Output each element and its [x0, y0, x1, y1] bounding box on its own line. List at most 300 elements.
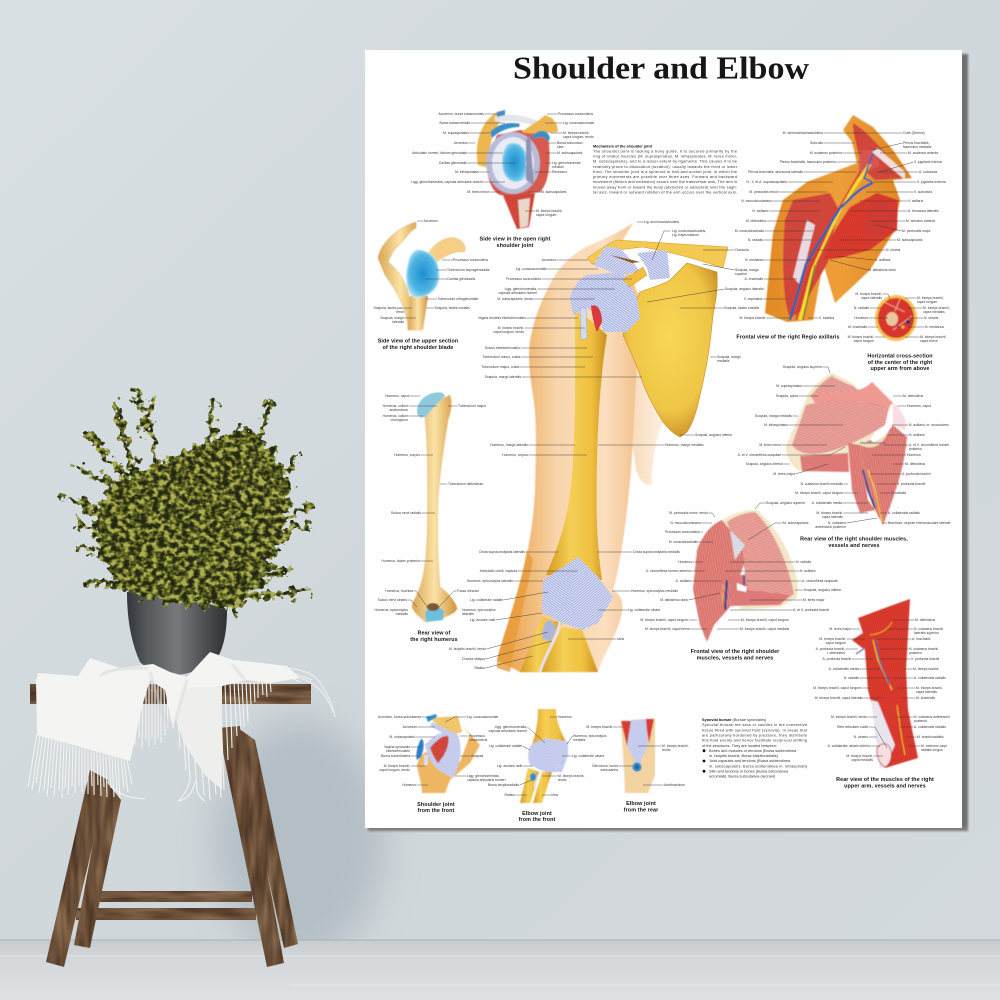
labels: left: M. biceps brachii, caput longum: [640, 618, 688, 622]
labels: right: caput lateralis: [916, 690, 937, 694]
labels: left: N. radialis: [854, 306, 869, 310]
labels: right: M. triceps brachii, caput longum: [741, 618, 789, 622]
leader lines: [404, 221, 453, 318]
illustration: elbow joint: [520, 709, 568, 803]
labels: right: V. axillaris: [908, 199, 923, 203]
labels: right: M. subscapularis: [783, 521, 809, 525]
labels: left: M. teres major: [829, 627, 852, 631]
block body: The shoulder joint is lacking a bony guide. It is secured primarily by the: [593, 149, 737, 153]
labels: right: Humerus, margo medialis: [665, 443, 704, 447]
labels: right: A. subclavia: [919, 170, 937, 174]
labels: right: M. teres major: [803, 598, 826, 602]
labels: left: M. biceps brachii,: [384, 764, 410, 768]
block body: ring of rotator muscles (M. supraspinatus, M. infraspinatus, M. teres minor,: [593, 154, 737, 158]
labels: left: [738, 365, 847, 529]
labels: left: Humerus, margo lateralis: [490, 443, 528, 447]
caption: Horizontal cross-section: [867, 354, 933, 360]
labels: left: Ligg. glenohumeralia,: [505, 287, 537, 291]
labels: right: Tuberculum majus: [458, 404, 486, 408]
labels: right: posterior: [909, 651, 923, 655]
labels: left: [488, 725, 527, 797]
labels: right: caput longum, tendo: [563, 135, 594, 139]
labels: right: Scapula, angulus lateralis: [725, 287, 764, 291]
block body: this fluid evenly and hence facilitate reciprocal shifting: [702, 739, 807, 743]
labels: right: N. cutaneus antebrachii: [914, 715, 950, 719]
labels: left: Humerus, corpus: [394, 453, 420, 457]
labels: left: M. teres minor: [759, 443, 782, 447]
labels: left: [449, 258, 556, 670]
labels: left: Scapula, spina: [776, 394, 798, 398]
labels: left: Articulatio humeri, labrum glenoidale: [412, 151, 467, 155]
labels: right: Bursa subcoraco-: [557, 141, 584, 145]
text block: mechanism of the shoulder joint: [593, 144, 738, 194]
labels: left: M. latissimus dorsi: [660, 598, 688, 602]
block body: Skin and tendons or bones (Bursa subcutanea: [709, 770, 789, 774]
labels: left: caput medialis: [851, 758, 873, 762]
block body: of the structures. They are located between:: [702, 744, 777, 748]
labels: right: M. brachioradialis: [917, 735, 944, 739]
leader lines: [408, 396, 458, 608]
labels: right: A. axillaris: [875, 258, 891, 262]
right panel fringe: [176, 678, 271, 801]
labels: left: M. pectoralis minor: [749, 190, 779, 194]
labels: left: M. teres minor: [467, 190, 490, 194]
labels: left: A. collateralis ulnaris inferior: [828, 744, 871, 748]
labels: left: N. cutaneus: [828, 521, 846, 525]
stool seat: [30, 684, 311, 704]
labels: right: [909, 618, 950, 752]
illustration: clavicle: [587, 240, 728, 268]
labels: left: Radius: [474, 666, 485, 670]
labels: right: V. profunda brachii: [897, 482, 925, 486]
illustration: frontal shoulder muscles: [693, 510, 798, 642]
labels: left: Scapula, angulus superior: [783, 365, 823, 369]
labels: left: intertubercularis: [386, 749, 410, 753]
labels: right: Scapula, margo: [717, 355, 741, 359]
labels: Antebrachium: [664, 783, 685, 787]
labels: left: Tuberculum minus, crista: [482, 355, 520, 359]
stool front right leg: [218, 726, 284, 967]
labels: right: caput medialis: [923, 310, 945, 314]
caption: Rear view of the right shoulder muscles,: [800, 536, 908, 542]
caption: of the center of the right: [868, 360, 932, 366]
panel: elbow joint from the front: [488, 709, 607, 823]
illustration: cross-section: [875, 295, 917, 341]
labels: right: M. biceps brachii,: [536, 209, 562, 213]
labels: left: N. radialis: [748, 238, 763, 242]
labels: left: Sulcus intertubercularis: [485, 346, 520, 350]
labels: right: Crista supracondylaris medialis: [633, 550, 680, 554]
labels: left: Humerus, collum: [383, 404, 408, 408]
block body: m. subscapularis, Bursa subtendinea m. infraspinati): [709, 764, 808, 768]
labels: right: M. deltoideus: [915, 618, 935, 622]
labels: right: Processus coracoideus: [558, 112, 593, 116]
labels: right: M. subscapularis: [897, 238, 923, 242]
labels: right: M. biceps brachii: [913, 667, 939, 671]
labels: left: M. triceps brachii, tendo: [831, 715, 867, 719]
labels: left: [640, 511, 708, 631]
labels: left: Humerus: [402, 783, 416, 787]
labels: left: Ligg. glenohumeralia,: [495, 725, 527, 729]
labels: right: Lig. coracoacromiale: [563, 121, 594, 125]
labels: left: Bursa subacromialis: [439, 121, 470, 125]
labels: subcutanea: [600, 768, 618, 772]
labels: tendo: [662, 748, 671, 752]
labels: right: Scapula, margo: [735, 268, 759, 272]
labels: left: V. cephalica: [744, 297, 762, 301]
labels: left: Humerus, facies posterior: [381, 559, 421, 563]
text block: synovial bursae: [702, 718, 808, 779]
illustration: radius and ulna: [520, 617, 598, 672]
labels: right: Tuberculum deltoideum: [448, 482, 483, 486]
labels: right: V. jugularis interna: [914, 160, 942, 164]
labels: left: M. triceps brachii, caput longum: [795, 491, 843, 495]
labels: right: M. subscapularis: [541, 190, 567, 194]
illustration: shoulder capsule ligaments: [570, 247, 670, 340]
labels: left: Acromion: [454, 141, 468, 145]
labels: left: M. infraspinatus: [764, 423, 788, 427]
caption: Side view in the open right: [480, 236, 551, 242]
labels: right: [448, 404, 496, 616]
labels: left: caput longum: [826, 641, 846, 645]
labels: left: A. et V. circumflexa scapulae: [738, 453, 781, 457]
labels: left: Vagina synovialis: [384, 745, 410, 749]
labels: right: lateralis superior: [914, 631, 940, 635]
labels: left: M. biceps brachii,: [848, 335, 874, 339]
labels: left: Bursa bicipitoradialis: [488, 783, 519, 787]
stool front left leg: [46, 770, 108, 967]
labels: right: N. radialis: [891, 491, 906, 495]
labels: left: Acromion, bursa subcutanea: [378, 715, 421, 719]
labels: right: Ulna: [551, 793, 558, 797]
stool back left leg: [74, 780, 121, 948]
caption: from the front: [519, 817, 555, 823]
labels: right: [819, 131, 946, 320]
labels: left: M. sternocleidomastoideus: [783, 131, 823, 135]
caption: from the rear: [624, 807, 659, 813]
leader lines: [846, 620, 920, 756]
labels: right: Lig. acromioclavicularis: [644, 220, 679, 224]
illustration: scapula: [623, 263, 717, 437]
labels: right: M. extensor carpi: [921, 744, 947, 748]
labels: left: A. profunda brachii,: [816, 647, 845, 651]
labels: right: Scapula, angulus inferior: [695, 433, 733, 437]
panel: frontal view of the right regio axillaris: [735, 115, 946, 340]
labels: left: Ligg. glenohumeralia, capsula articularis humeri: [411, 180, 483, 184]
block body: Bones and muscles or tendons (Bursa subtendinea: [709, 749, 797, 753]
labels: left: Plexus brachialis, fasciculus posterior: [780, 160, 837, 164]
labels: right: V. subclavia: [914, 190, 932, 194]
labels: right: [740, 501, 842, 631]
blanket main folds: [36, 652, 300, 761]
labels: left: M. coracobrachialis: [735, 229, 764, 233]
block body: tissue filled with synovial fluid (synovia). In areas that: [702, 728, 808, 732]
labels: right: Scapula, facies costalis: [434, 306, 470, 310]
caption: vessels and nerves: [828, 543, 880, 549]
labels: left: M. biceps brachii, caput breve: [645, 627, 690, 631]
labels: right: medialis: [573, 738, 586, 742]
labels: left: Processus coracoideus: [506, 277, 541, 281]
labels: left: medialis: [396, 612, 408, 616]
labels: left: Acromion: [403, 725, 417, 729]
labels: right: Lig. trapezoideum: [672, 233, 699, 237]
labels: right: caput breve: [920, 339, 938, 343]
block body: primary movements are possible over three axes. Forward and backward: [593, 175, 737, 179]
labels: right: Clavicula: [735, 248, 749, 252]
leader lines: [516, 717, 572, 795]
labels: right: N. cutaneus brachii: [909, 647, 938, 651]
labels: right: Humerus, caput: [907, 404, 931, 408]
labels: right: A. collateralis radialis: [914, 725, 946, 729]
labels: left: r. deltoideus: [827, 651, 845, 655]
labels: left: M. biceps brachii,: [498, 326, 524, 330]
right fringe trail: [262, 664, 335, 717]
caption: of the right shoulder blade: [383, 345, 453, 351]
labels: left: [813, 627, 873, 762]
labels: right: Humerus, epicondylus medialis: [631, 589, 678, 593]
labels: left: capsula articularis humeri: [489, 729, 527, 733]
labels: left: lateralis: [392, 320, 404, 324]
title: Shoulder and Elbow: [513, 50, 809, 86]
labels: right: Lig. collaterale ulnare: [572, 754, 604, 758]
labels: right: A. et V. circumflexa humeri: [909, 443, 949, 447]
panel: main arm and shoulder diagram: [449, 220, 764, 672]
labels: right: [551, 715, 607, 797]
labels: right: Tuberculum infraglenoidale: [438, 297, 478, 301]
labels: M. triceps brachii,: [662, 744, 689, 748]
labels: right: N. cutaneus brachii: [914, 627, 943, 631]
labels: left: caput longum, tendo: [493, 330, 524, 334]
labels: right: Humerus: [907, 453, 921, 457]
labels: left: M. subscapularis: [390, 735, 415, 739]
labels: right: coracoideus: [469, 738, 488, 742]
white blanket: [28, 652, 335, 801]
labels: left: Processus coracoideus: [665, 530, 700, 534]
block body: tal axis. Inward or outward rotation of the arm occurs over the vertical axis.: [593, 190, 737, 194]
leader lines: [612, 727, 664, 785]
stool rails: [76, 891, 256, 920]
labels: left: Scapula, margo: [380, 316, 404, 320]
labels: right: Tuberculum supraglenoidale: [447, 268, 490, 272]
illustration: arm skin: [497, 223, 663, 672]
labels: right: medium: [552, 165, 564, 169]
labels: left: Cavitas glenoidalis: [439, 161, 467, 165]
labels: left: Humerus, corpus: [502, 453, 528, 457]
stool back right leg: [235, 726, 298, 948]
illustration: elbow rear: [621, 719, 655, 793]
labels: right: M. triceps brachii,: [923, 306, 950, 310]
labels: right: M. triceps brachii,: [916, 686, 943, 690]
labels: left: chirurgicum: [390, 418, 408, 422]
labels: left: N. cutaneus brachii medialis: [801, 482, 843, 486]
caption: Rear view of the muscles of the right: [836, 777, 934, 783]
illustration: rear arm muscles: [852, 599, 918, 768]
labels: left: Sulcus nervi ulnaris: [378, 598, 407, 602]
caption: upper arm, vessels and nerves: [844, 783, 926, 789]
labels: right: [888, 394, 951, 525]
labels: right: Brachium, septum intermusculare laterale: [888, 521, 951, 525]
labels: left: M. scalenus posterior: [810, 151, 843, 155]
illustration: humerus: [546, 310, 607, 580]
labels: right: A. circumflexa scapulae: [802, 579, 838, 583]
labels: right: A. collateralis radialis: [914, 676, 946, 680]
labels: left: Scapula, margo lateralis: [485, 375, 521, 379]
bullets: [703, 749, 705, 773]
labels: left: M. supraspinatus: [443, 131, 469, 135]
labels: right: M. triceps brachii,: [917, 296, 944, 300]
labels: right: N. ulnaris: [886, 248, 901, 252]
labels: right: N. ulnaris: [924, 316, 939, 320]
caption: upper arm from above: [871, 366, 929, 372]
labels: right: M. deltoideus: [905, 462, 925, 466]
labels: right: M. scalenus anterior: [908, 151, 939, 155]
labels: left: [378, 715, 421, 787]
labels: left: M. bicipitis brachii, tendo: [449, 647, 486, 651]
block body: M. subscapularis), and to a lesser extent by ligaments. This causes it to be: [593, 160, 737, 164]
illustration: open joint: [477, 110, 558, 229]
labels: left: N. musculocutaneus: [670, 521, 701, 525]
panel: side view of the upper section of the right shoulder blade: [373, 219, 490, 351]
labels: left: Lig. collaterale radiale: [470, 598, 503, 602]
labels: right: A. thoracica lateralis: [908, 209, 939, 213]
labels: right: idea: [557, 145, 564, 149]
labels: right: Lig. glenohumerale: [552, 161, 581, 165]
labels: left: Rete articulare cubiti: [837, 725, 868, 729]
labels: left: [411, 112, 490, 194]
caption: Elbow joint: [626, 801, 656, 807]
caption: from the front: [418, 808, 454, 814]
labels: right: A. et V. profunda brachii: [793, 608, 829, 612]
labels: right: M. serratus anterior: [906, 219, 936, 223]
block body: Joint-capsules and tendons (Bursa subtendinea: [709, 759, 791, 763]
labels: right: Humerus: [558, 715, 572, 719]
labels: left: M. triceps brachii,: [819, 637, 846, 641]
labels: left: Chorda obliqua: [462, 657, 485, 661]
labels: left: Articulatio cubiti, capsula: [480, 569, 517, 573]
floor: [0, 940, 1000, 1000]
labels: right: lateralis: [462, 612, 474, 616]
labels: right: A. collateralis radialis: [888, 511, 920, 515]
leader lines: [688, 503, 804, 629]
labels: right: posterior: [909, 447, 923, 451]
labels: right: caput longum: [536, 213, 557, 217]
labels: right: M. deltoideus: [903, 394, 923, 398]
labels: right: Scapula, angulus superior: [766, 501, 806, 505]
labels: left: caput lateralis: [822, 515, 843, 519]
panel: rear view of the right humerus: [374, 392, 496, 643]
labels: M. triceps brachii: [586, 725, 612, 729]
labels: left: [374, 394, 421, 616]
labels: left: M. biceps brachii: [740, 316, 765, 320]
labels: right: V. jugularis externa: [917, 180, 946, 184]
labels: right: Cutis (Dermis): [903, 131, 925, 135]
labels: right: Humerus, epicondylus: [573, 734, 607, 738]
caption: Elbow joint: [522, 811, 552, 817]
poster sheet: [365, 50, 962, 828]
caption: Side view of the upper section: [378, 338, 458, 344]
caption: shoulder joint: [496, 243, 534, 249]
labels: right: V. basilica: [819, 316, 834, 320]
labels: right: M. latissimus dorsi: [868, 268, 896, 272]
labels: right: M. subscapularis: [557, 151, 583, 155]
labels: left: antebrachii posterior: [815, 525, 847, 529]
caption: Frontal view of the right Regio axillaris: [736, 334, 840, 340]
labels: left: N., V. et A. suprascapularis: [746, 180, 787, 184]
labels: right: Acromion: [424, 219, 438, 223]
labels: right: N. axillaris: [909, 433, 925, 437]
caption: Frontal view of the right shoulder: [691, 649, 780, 655]
block body: Synovial bursae are sacs or cavities in the connective: [702, 723, 807, 727]
labels: left: Lig. coracoacromiale: [516, 267, 547, 271]
block body: are particularly burdened by pressure, they distribute: [702, 734, 807, 738]
labels: left: Subcutis: [810, 141, 823, 145]
labels: right: radialis longus: [921, 748, 943, 752]
labels: right: M. biceps brachii,: [563, 131, 589, 135]
labels: right: [917, 296, 950, 343]
labels: right: N. radialis: [796, 560, 811, 564]
stool: [30, 684, 311, 967]
labels: right: capsula articularis humeri: [467, 778, 506, 782]
panel: elbow joint from the rear: [586, 719, 689, 813]
left panel fringe: [28, 734, 145, 799]
labels: left: M. triceps brachii,: [816, 511, 843, 515]
labels: right: Scapula, angulus inferior: [804, 588, 842, 592]
block heading: Mechanism of the shoulder joint: [593, 144, 653, 148]
labels: left: Humerus: [854, 316, 868, 320]
labels: left: N. ulnaris: [854, 735, 868, 739]
block body: front. The shoulder joint is a spheroid or ball-and-socket joint, in which the: [593, 170, 737, 174]
panel: frontal view of the right shoulder muscles: [640, 501, 842, 661]
labels: right: Cavitas glenoidalis: [447, 277, 476, 281]
labels: right: Plexus brachialis,: [903, 141, 929, 145]
labels: right: superior: [735, 272, 748, 276]
labels: left: Lig. collaterale radiale: [489, 744, 522, 748]
labels: left: M. triceps brachii,: [855, 292, 882, 296]
labels: left: Sulcus nervi radialis: [391, 511, 421, 515]
panel: side view in the open right shoulder joint: [411, 110, 594, 249]
labels: right: Lig. coracoclavicularis,: [672, 229, 706, 233]
labels: right: [617, 220, 764, 641]
labels: left: capsula articularis humeri: [499, 291, 537, 295]
labels: left: N. musculocutaneus: [741, 199, 772, 203]
block heading: Synovial bursae (Bursae synoviales): [702, 718, 767, 722]
block body: movement (flexion and extension) occurs over the transversal axis. The arm is: [593, 180, 737, 184]
labels: right: M. biceps brachii,: [558, 774, 584, 778]
labels: right: A. profunda brachii: [902, 472, 931, 476]
labels: right: Ulna: [617, 637, 624, 641]
labels: right: medialis: [717, 359, 730, 363]
labels: left: M. teres major: [773, 472, 796, 476]
labels: left: Lig. anulare radii: [497, 764, 522, 768]
caption: the right humerus: [410, 637, 458, 643]
poster shadow: [368, 54, 968, 831]
labels: left: A. profunda brachii: [823, 657, 851, 661]
labels: left: [735, 131, 843, 320]
labels: right: A. brachialis: [912, 637, 931, 641]
wall shadow beside the stool: [215, 720, 385, 960]
labels: left: N. medianus: [745, 258, 764, 262]
illustration: shoulder joint: [416, 714, 480, 793]
labels: left: M. coracobrachialis: [669, 540, 698, 544]
leader lines: [486, 222, 734, 668]
labels: Olecranon, bursa: [592, 764, 618, 768]
labels: left: M. infraspinatus: [455, 170, 479, 174]
labels: left: Humerus, epicondylus lateralis: [467, 579, 513, 583]
labels: left: A. collateralis media: [812, 501, 842, 505]
labels: left: caput lateralis: [861, 296, 882, 300]
labels: left: M. pectoralis minor, tendo: [669, 511, 708, 515]
labels: right: V. profunda brachii: [911, 657, 939, 661]
